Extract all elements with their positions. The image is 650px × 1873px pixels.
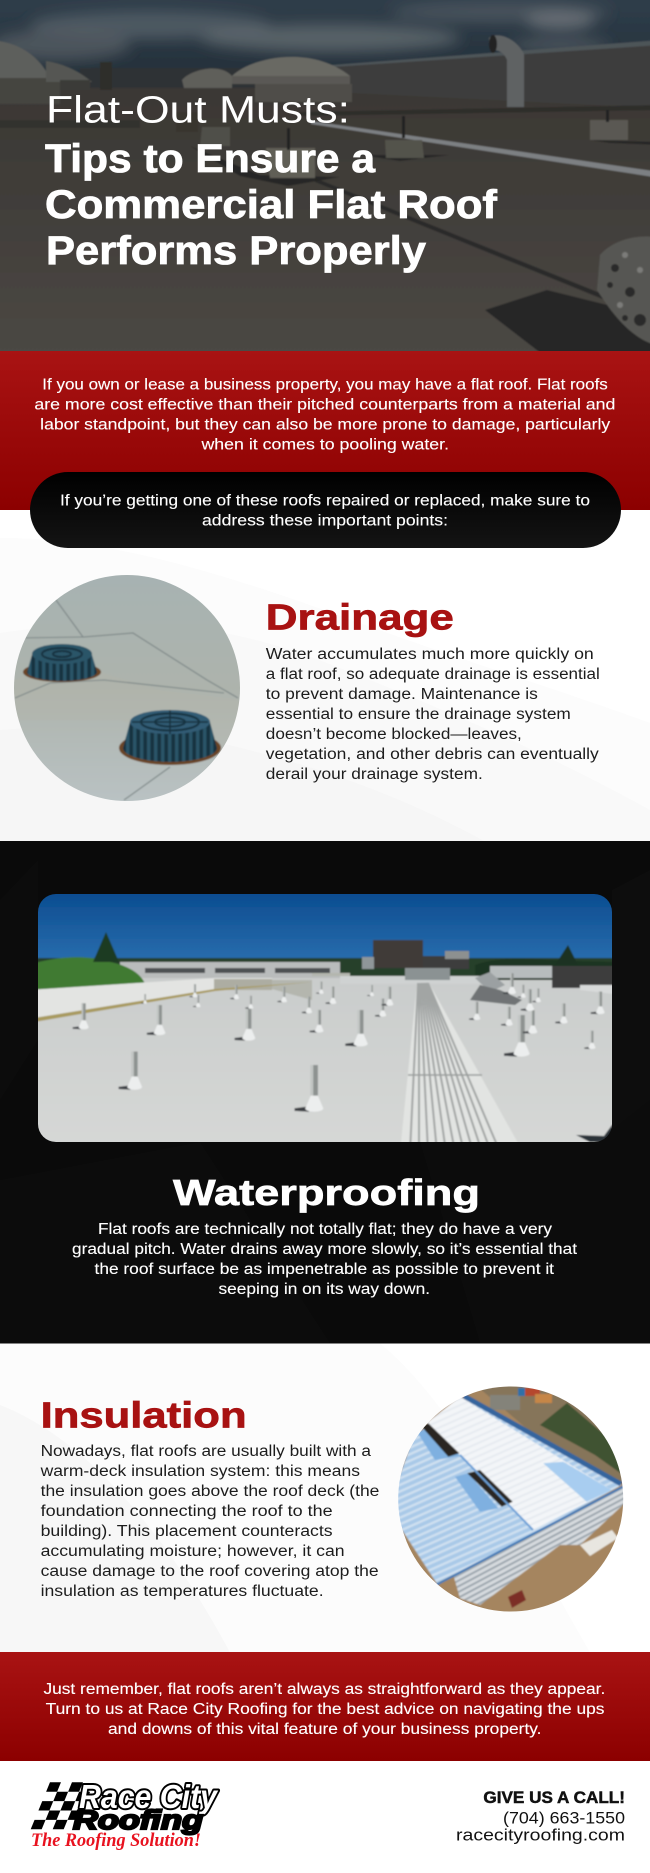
- heading: Drainage: Drainage: [266, 596, 454, 638]
- logo: Race City Roofing: Race City: [79, 1778, 219, 1815]
- callout pill: If you’re getting one of these roofs repaired or replaced, make sure to: [60, 493, 590, 510]
- panel: footer: [0, 1761, 650, 1873]
- header photo: flat commercial roof with skylights: [0, 0, 650, 361]
- text: insulation paragraph: warm-deck insulation system: this means: [39, 1463, 360, 1480]
- text: insulation paragraph: building). This placement counteracts: [41, 1523, 333, 1540]
- text: waterproofing paragraph: [72, 1221, 578, 1298]
- title line: Tips to Ensure a: Tips to Ensure a: [45, 137, 376, 181]
- photo: white flat roof with vents: [38, 894, 612, 1142]
- intro text: when it comes to pooling water.: [200, 436, 449, 454]
- text: waterproofing paragraph: Flat roofs are technically not totally flat; they do have a very: [98, 1221, 552, 1238]
- panel: closing red band: [0, 1652, 650, 1761]
- text: insulation paragraph: cause damage to the roof covering atop the: [41, 1563, 379, 1580]
- title: [45, 90, 498, 273]
- contact details: racecityroofing.com: [456, 1825, 625, 1844]
- intro text: labor standpoint, but they can also be more prone to damage, particularly: [40, 416, 610, 434]
- contact details: (704) 663-1550: [503, 1809, 625, 1828]
- title line: Flat-Out Musts: Flat-Out Musts:: [46, 90, 350, 132]
- text: insulation paragraph: [39, 1443, 379, 1600]
- intro text: If you own or lease a business property, you may have a flat roof. Flat roofs: [42, 376, 608, 394]
- text: drainage paragraph: derail your drainage system.: [266, 766, 483, 783]
- text: insulation paragraph: accumulating moisture; however, it can: [41, 1543, 345, 1560]
- text: drainage paragraph: essential to ensure the drainage system: [266, 706, 571, 723]
- panel: drainage background: [0, 510, 650, 841]
- icon: checkered flag: [31, 1782, 94, 1829]
- text: closing message: Turn to us at Race City Roofing for the best advice on navigating the ups: [46, 1701, 605, 1718]
- text: waterproofing paragraph: the roof surface be as impenetrable as possible to prevent it: [94, 1261, 555, 1278]
- callout pill: [30, 472, 621, 548]
- text: insulation paragraph: insulation as temperatures fluctuate.: [41, 1583, 324, 1600]
- contact details: GIVE US A CALL!: [483, 1788, 625, 1807]
- intro text: are more cost effective than their pitched counterparts from a material and: [34, 396, 615, 414]
- panel: intro red band: [0, 351, 650, 510]
- logo: Race City Roofing: Roofing: [73, 1805, 204, 1835]
- photo: aerial view of metal roof under construction: [398, 1386, 624, 1612]
- callout pill: address these important points:: [202, 513, 448, 530]
- text: drainage paragraph: Water accumulates much more quickly on: [266, 646, 594, 663]
- photo: roof drains: [14, 575, 240, 801]
- panel: waterproofing dark band: [0, 841, 650, 1344]
- text: drainage paragraph: to prevent damage. Maintenance is: [266, 686, 538, 703]
- text: insulation paragraph: Nowadays, flat roofs are usually built with a: [41, 1443, 371, 1460]
- text: drainage paragraph: doesn’t become blocked—leaves,: [266, 726, 522, 743]
- text: insulation paragraph: foundation connecting the roof to the: [41, 1503, 333, 1520]
- text: waterproofing paragraph: seeping in on its way down.: [218, 1281, 430, 1298]
- title line: Performs Properly: Performs Properly: [46, 229, 427, 273]
- text: drainage paragraph: [266, 646, 600, 783]
- contact details: [456, 1788, 625, 1844]
- panel: insulation background: [0, 1344, 650, 1652]
- intro text: [34, 376, 615, 454]
- text: closing message: [44, 1681, 605, 1738]
- text: drainage paragraph: a flat roof, so adequate drainage is essential: [266, 666, 600, 683]
- logo: Race City Roofing: [31, 1778, 219, 1851]
- logo: Race City Roofing: The Roofing Solution!: [31, 1830, 201, 1851]
- text: closing message: and downs of this vital feature of your business property.: [108, 1721, 542, 1738]
- heading: Insulation: Insulation: [41, 1394, 247, 1435]
- text: waterproofing paragraph: gradual pitch. Water drains away more slowly, so it’s essential that: [72, 1241, 578, 1258]
- text: drainage paragraph: vegetation, and other debris can eventually: [266, 746, 599, 763]
- title line: Commercial Flat Roof: Commercial Flat Roof: [45, 183, 498, 227]
- heading: Waterproofing: Waterproofing: [173, 1172, 480, 1213]
- text: closing message: Just remember, flat roofs aren’t always as straightforward as they appear.: [44, 1681, 605, 1698]
- text: insulation paragraph: the insulation goes above the roof deck (the: [41, 1483, 379, 1500]
